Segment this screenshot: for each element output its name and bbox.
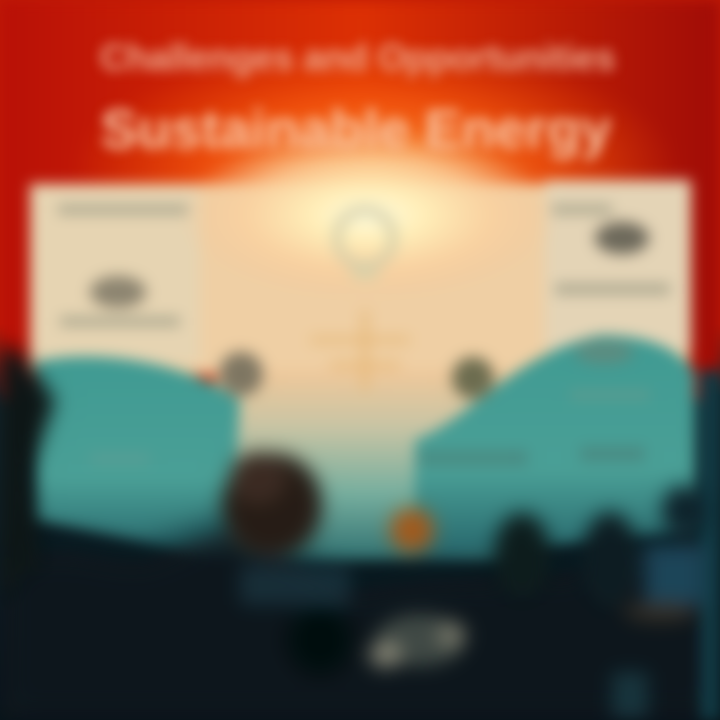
dark audience silhouettes — [0, 345, 720, 720]
title line 1: Challenges and Opportunities — [100, 37, 615, 78]
red header background — [0, 0, 720, 400]
icon: left circular badge — [219, 352, 263, 396]
teal lower panel — [36, 335, 695, 560]
cream panel — [30, 180, 691, 374]
text block hints — [58, 204, 670, 466]
icon: left panel emblem — [90, 276, 146, 308]
central sunlight glow — [178, 130, 558, 300]
icon: right panel emblem — [595, 222, 649, 254]
icon: upper teal panel emblem — [574, 340, 634, 364]
center diagram — [310, 310, 410, 390]
title line 2: Sustainable Energy — [101, 98, 611, 160]
icon: central lightbulb — [337, 210, 393, 280]
icon: right circular badge — [452, 357, 494, 399]
